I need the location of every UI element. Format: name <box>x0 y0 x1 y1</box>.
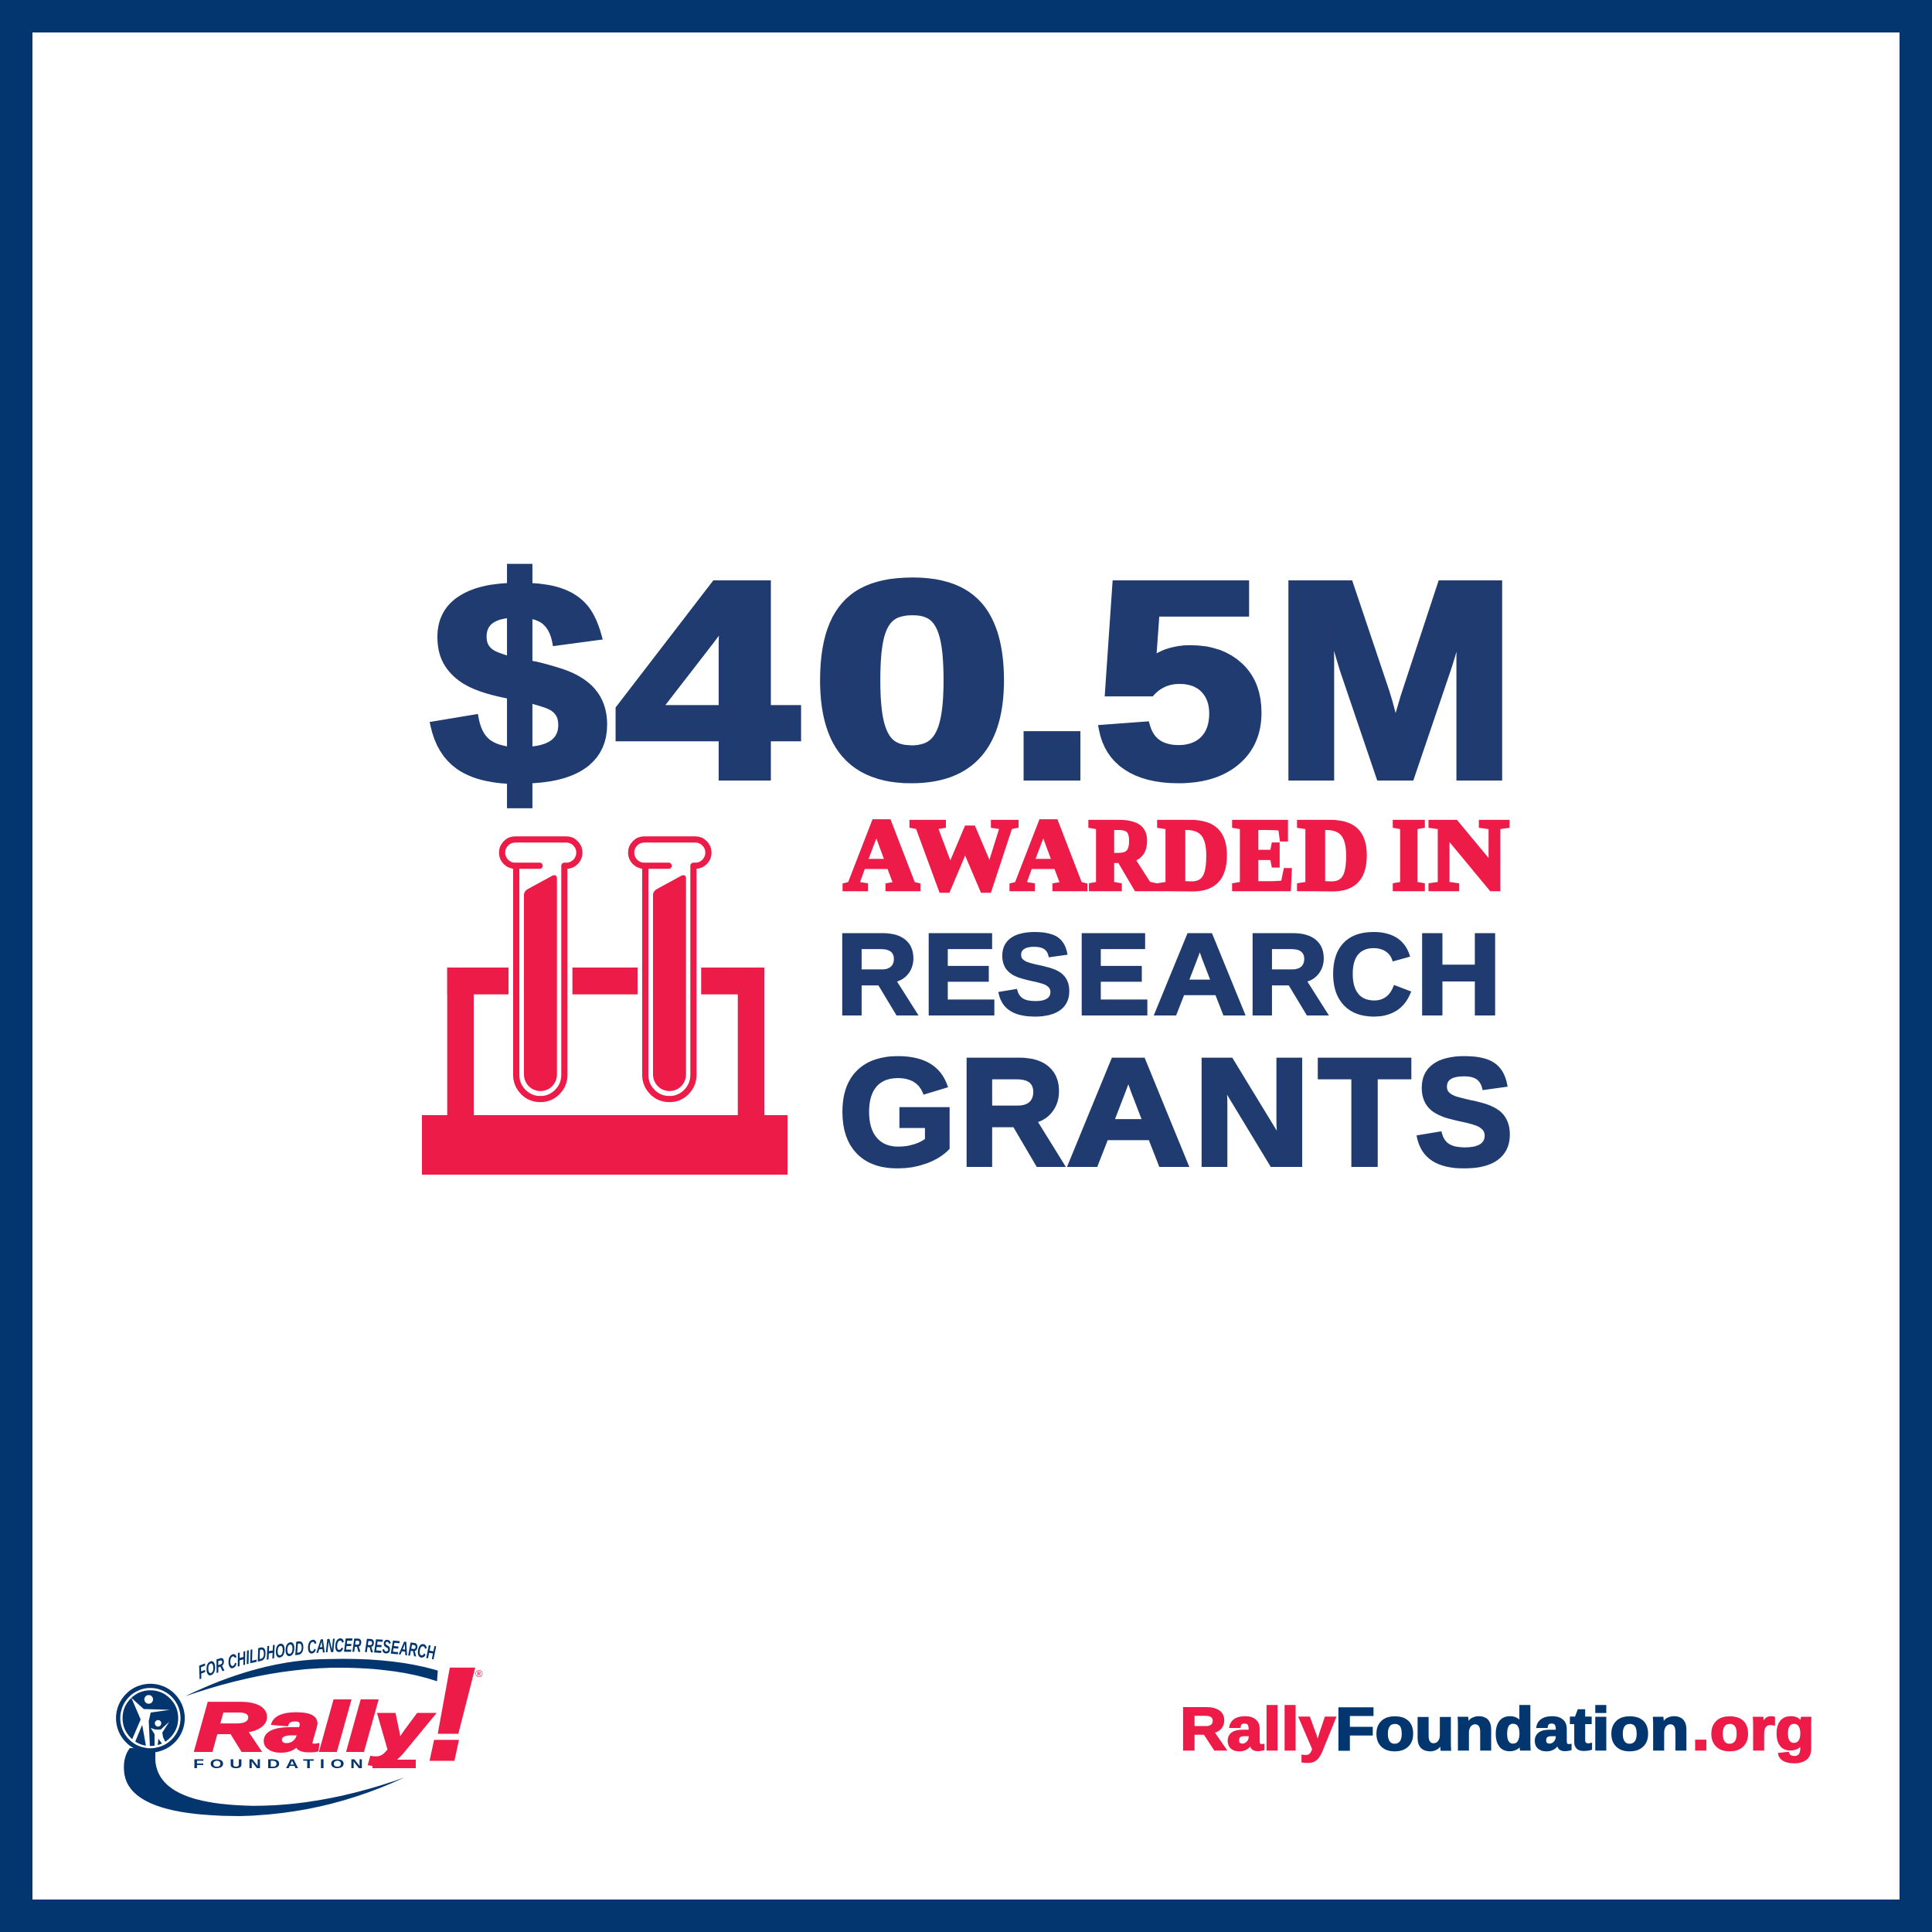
website address: Rally <box>1180 1696 1335 1763</box>
headline figure: $40.5M: M <box>1273 523 1518 836</box>
text: RESEARCH: R <box>1247 910 1328 1039</box>
text: RESEARCH: H <box>1416 910 1502 1039</box>
logo top swoosh <box>185 1659 437 1696</box>
text: AWARDED IN: E <box>1233 798 1294 911</box>
text: RESEARCH: S <box>997 910 1072 1039</box>
text: AWARDED IN: D <box>1298 798 1369 911</box>
headline figure: $40.5M: 5 <box>1094 523 1266 836</box>
headline figure: $40.5M: $ <box>430 522 607 845</box>
text: AWARDED IN: A <box>1011 798 1086 911</box>
text: RESEARCH: R <box>836 910 918 1039</box>
logo bottom swoosh <box>124 1748 404 1816</box>
text: GRANTS: G <box>838 1027 957 1197</box>
logo registered mark: ® <box>475 1668 483 1679</box>
text: RESEARCH: E <box>1076 910 1150 1039</box>
text: AWARDED IN: R <box>1089 798 1155 911</box>
logo tagline: FOR CHILDHOOD CANCER RESEARCH <box>199 1638 436 1679</box>
text: AWARDED IN: D <box>1158 798 1230 911</box>
text: GRANTS: R <box>959 1027 1065 1197</box>
logo word: FOUNDATION: FOUNDATION <box>193 1757 363 1771</box>
text: RESEARCH: C <box>1330 910 1413 1039</box>
left test tube <box>502 839 580 1099</box>
text: AWARDED IN: W <box>910 798 1018 911</box>
right test tube <box>631 839 709 1099</box>
logo emblem: adult and child in circle <box>116 1684 185 1753</box>
logo: Rally Foundation <box>116 1638 483 1816</box>
website address: Foundation <box>1335 1696 1689 1763</box>
text: AWARDED IN: I <box>1392 798 1426 911</box>
text: RESEARCH: A <box>1153 910 1247 1039</box>
text: GRANTS: T <box>1318 1027 1410 1197</box>
headline figure: $40.5M: 0 <box>811 523 1014 836</box>
website address: .org <box>1692 1696 1815 1763</box>
logo wordmark: Rally: Rally <box>195 1689 434 1765</box>
text: RESEARCH: E <box>923 910 997 1039</box>
logo exclamation mark: ! <box>427 1641 475 1787</box>
icon: test tubes in a rack <box>422 839 787 1175</box>
headline figure: $40.5M: . <box>1005 523 1099 836</box>
text: AWARDED IN: N <box>1429 798 1509 911</box>
text: AWARDED IN: A <box>844 798 919 911</box>
headline figure: $40.5M: 4 <box>615 523 801 836</box>
text: GRANTS: A <box>1066 1027 1190 1197</box>
text: GRANTS: S <box>1415 1027 1513 1197</box>
text: GRANTS: N <box>1193 1027 1311 1197</box>
rack base and frame <box>422 968 787 1175</box>
